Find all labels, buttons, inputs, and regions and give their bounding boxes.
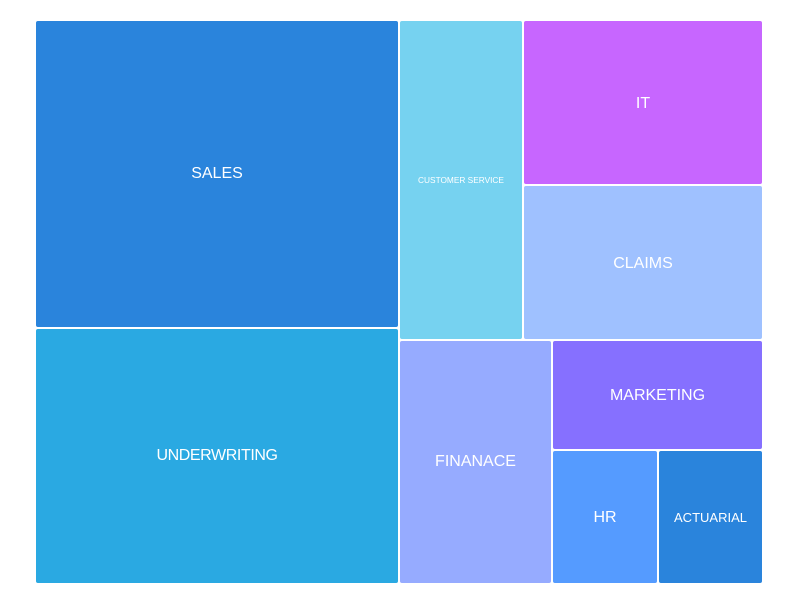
panel: HR	[553, 451, 657, 583]
panel: IT	[524, 21, 762, 184]
panel: HR: HR	[593, 509, 617, 526]
panel: actuarial	[659, 451, 762, 583]
panel: claims: CLAIMS	[613, 254, 673, 272]
panel: IT: IT	[636, 94, 650, 112]
panel: customer service: CUSTOMER SERVICE	[418, 175, 504, 185]
panel: actuarial: ACTUARIAL	[674, 510, 747, 524]
panel: underwriting: UNDERWRITING	[156, 447, 278, 464]
panel: finance	[400, 341, 551, 583]
panel: marketing: MARKETING	[610, 387, 705, 404]
panel: finance: FINANACE	[435, 453, 516, 470]
panel: sales: SALES	[191, 165, 243, 182]
panel: sales	[36, 21, 398, 327]
panel: claims	[524, 186, 762, 339]
panel: customer service	[400, 21, 522, 339]
panel: underwriting	[36, 329, 398, 583]
panel: marketing	[553, 341, 762, 449]
